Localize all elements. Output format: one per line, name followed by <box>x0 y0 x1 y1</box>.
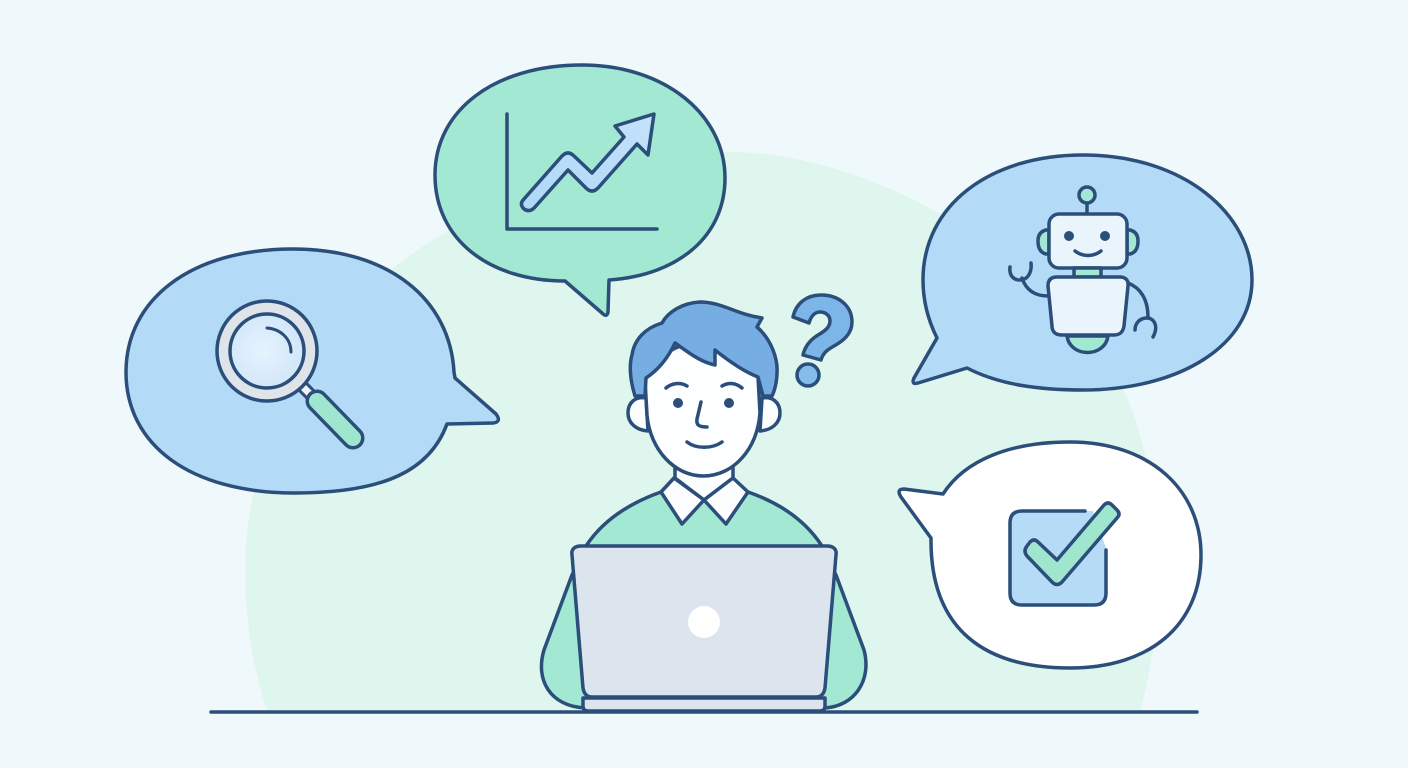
collar <box>661 478 748 524</box>
speech bubble: checkmark <box>899 442 1201 668</box>
ground line <box>211 710 1197 714</box>
speech bubble: robot <box>913 155 1252 390</box>
background blob <box>245 152 1158 711</box>
neck <box>675 462 733 500</box>
icon: robot <box>1010 187 1156 352</box>
icon: growth chart <box>507 114 657 229</box>
person <box>541 302 866 711</box>
hair <box>630 302 777 396</box>
head <box>645 342 760 476</box>
sweater and arms <box>541 492 866 708</box>
laptop <box>572 546 836 711</box>
question mark <box>793 295 852 386</box>
icon: magnifying glass <box>217 301 353 438</box>
speech bubble: magnifier <box>126 249 498 493</box>
icon: checkbox <box>1010 503 1119 605</box>
speech bubble: chart <box>435 65 725 315</box>
face <box>666 384 742 447</box>
ears <box>628 398 780 431</box>
